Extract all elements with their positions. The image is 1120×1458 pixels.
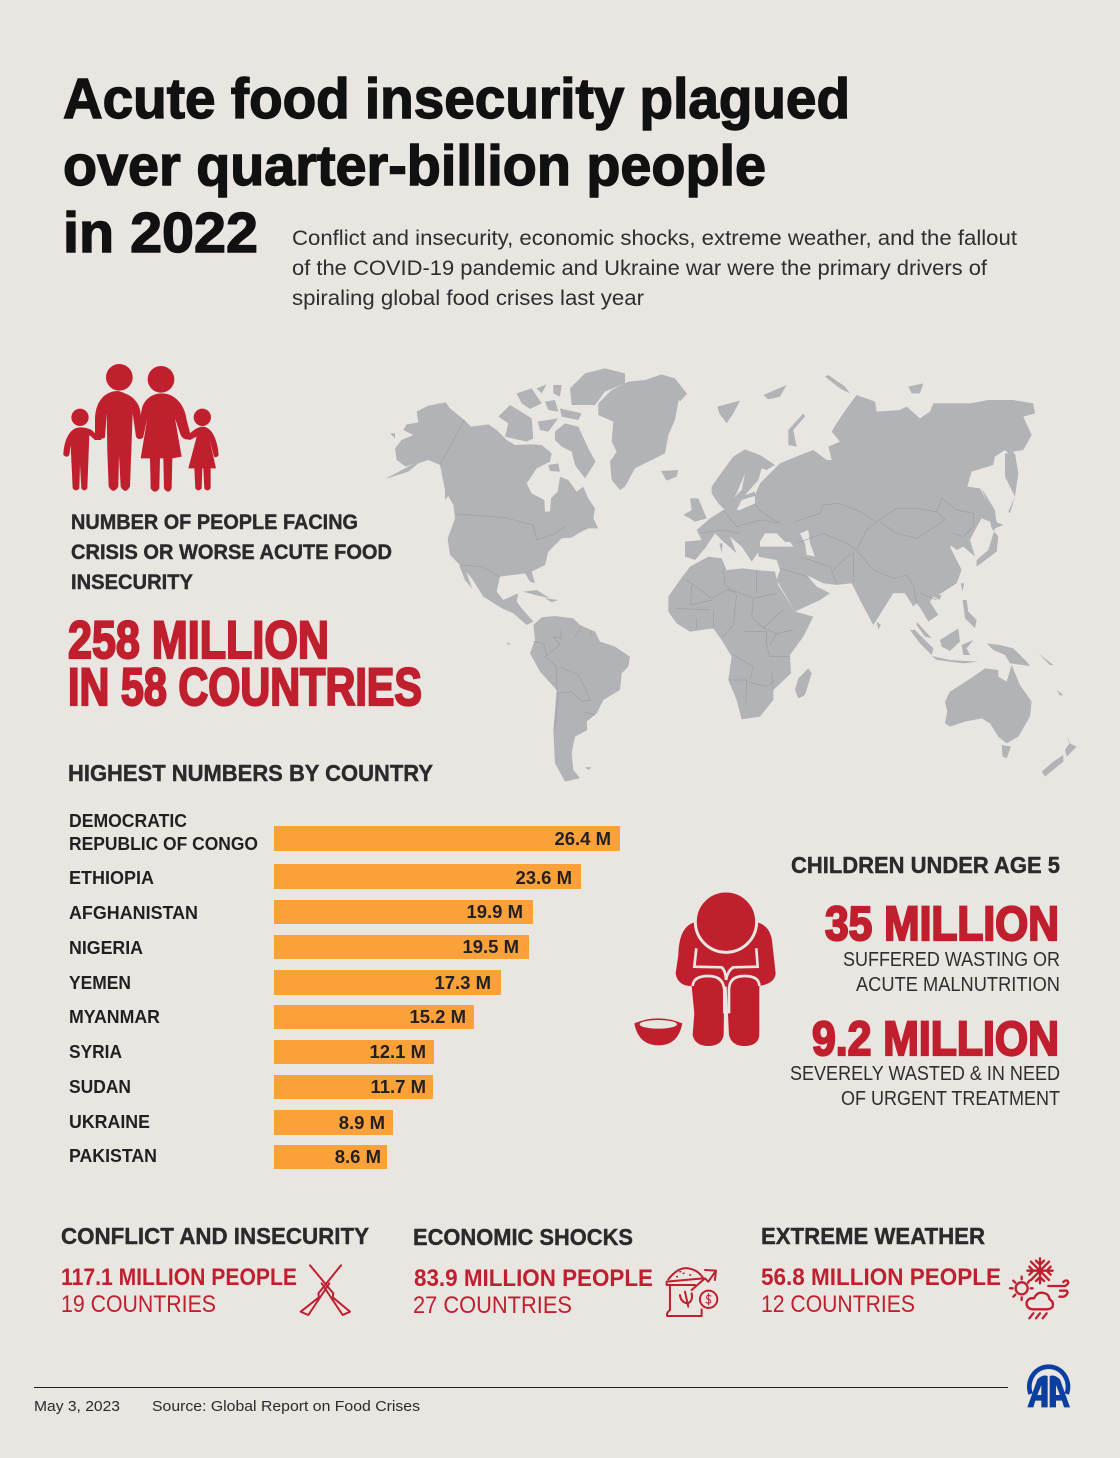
bar chart [69,810,620,1169]
bar chart: PAKISTAN [69,1145,157,1166]
panel: economic shocks: 83.9 MILLION PEOPLE [414,1265,653,1292]
panel: extreme weather [761,1223,1068,1318]
children under age 5 panel: SUFFERED WASTING OR [843,949,1060,971]
children under age 5 panel [790,852,1060,1110]
big number: 258 million [68,611,422,717]
footer: Source: Global Report on Food Crises [152,1399,420,1415]
bar chart: SUDAN [69,1076,131,1097]
panel: economic shocks [413,1224,717,1319]
panel: conflict and insecurity: 117.1 MILLION PEOPLE [61,1264,297,1291]
subtitle text: Conflict and insecurity, economic shocks, extreme weather, and the fallout [292,226,1017,250]
panel: extreme weather: 56.8 MILLION PEOPLE [761,1264,1001,1291]
bar chart: UKRAINE [69,1111,150,1132]
subtitle text: spiraling global food crises last year [292,286,644,310]
title: in 2022 [63,201,258,265]
subtitle text: of the COVID-19 pandemic and Ukraine war were the primary drivers of [292,256,987,280]
bar chart: 26.4 M [554,828,611,849]
children under age 5 panel: SEVERELY WASTED & IN NEED [790,1063,1060,1085]
children under age 5 panel: 9.2 MILLION [812,1013,1059,1066]
footer: May 3, 2023 [34,1399,120,1415]
people facing crisis label: INSECURITY [71,570,193,594]
bar chart: MYANMAR [69,1006,160,1027]
title: over quarter-billion people [63,134,766,198]
title [63,67,850,265]
panel: extreme weather: EXTREME WEATHER [761,1223,985,1249]
heading: highest numbers by country: HIGHEST NUMBERS BY COUNTRY [68,760,433,786]
children under age 5 panel: OF URGENT TREATMENT [841,1088,1060,1110]
bar chart: 19.5 M [462,936,519,957]
panel: conflict and insecurity [61,1223,369,1318]
bar chart: 8.9 M [339,1112,385,1133]
icon: family [63,364,219,492]
children under age 5 panel: 35 MILLION [825,898,1059,951]
bar chart: 19.9 M [466,901,523,922]
panel: conflict and insecurity: CONFLICT AND INSECURITY [61,1223,369,1249]
bar chart: REPUBLIC OF CONGO [69,833,258,854]
bar chart: AFGHANISTAN [69,902,198,923]
panel: economic shocks: 27 COUNTRIES [413,1292,572,1319]
bar chart: 12.1 M [369,1041,426,1062]
bar chart: NIGERIA [69,937,143,958]
icon: grain sack with rising arrow [667,1268,717,1316]
bar chart: 11.7 M [370,1076,426,1097]
panel: extreme weather: 12 COUNTRIES [761,1291,915,1318]
world map [385,368,1077,782]
bar chart: 23.6 M [515,867,572,888]
bar chart: ETHIOPIA [69,867,154,888]
bar chart: 15.2 M [409,1006,466,1027]
panel: conflict and insecurity: 19 COUNTRIES [61,1291,216,1318]
people facing crisis label: NUMBER OF PEOPLE FACING [71,510,358,534]
icon: snow, sun, cloud, wind [1010,1258,1068,1318]
title: Acute food insecurity plagued [63,67,850,131]
bar chart: DEMOCRATIC [69,810,187,831]
icon: hungry child with bowl [634,891,776,1046]
children under age 5 panel: CHILDREN UNDER AGE 5 [791,852,1060,878]
bar chart: 17.3 M [434,972,491,993]
big number: 258 million: IN 58 COUNTRIES [68,658,422,717]
subtitle text [292,226,1017,310]
icon: AA logo [1027,1367,1070,1407]
bar chart: 8.6 M [335,1146,381,1167]
people facing crisis label [71,510,392,594]
people facing crisis label: CRISIS OR WORSE ACUTE FOOD [71,540,392,564]
big number: 258 million: 258 MILLION [68,611,329,670]
footer [34,1387,1008,1415]
bar chart: YEMEN [69,972,131,993]
children under age 5 panel: ACUTE MALNUTRITION [856,974,1060,996]
panel: economic shocks: ECONOMIC SHOCKS [413,1224,633,1250]
icon: crossed rifles [301,1265,350,1315]
bar chart: SYRIA [69,1041,122,1062]
